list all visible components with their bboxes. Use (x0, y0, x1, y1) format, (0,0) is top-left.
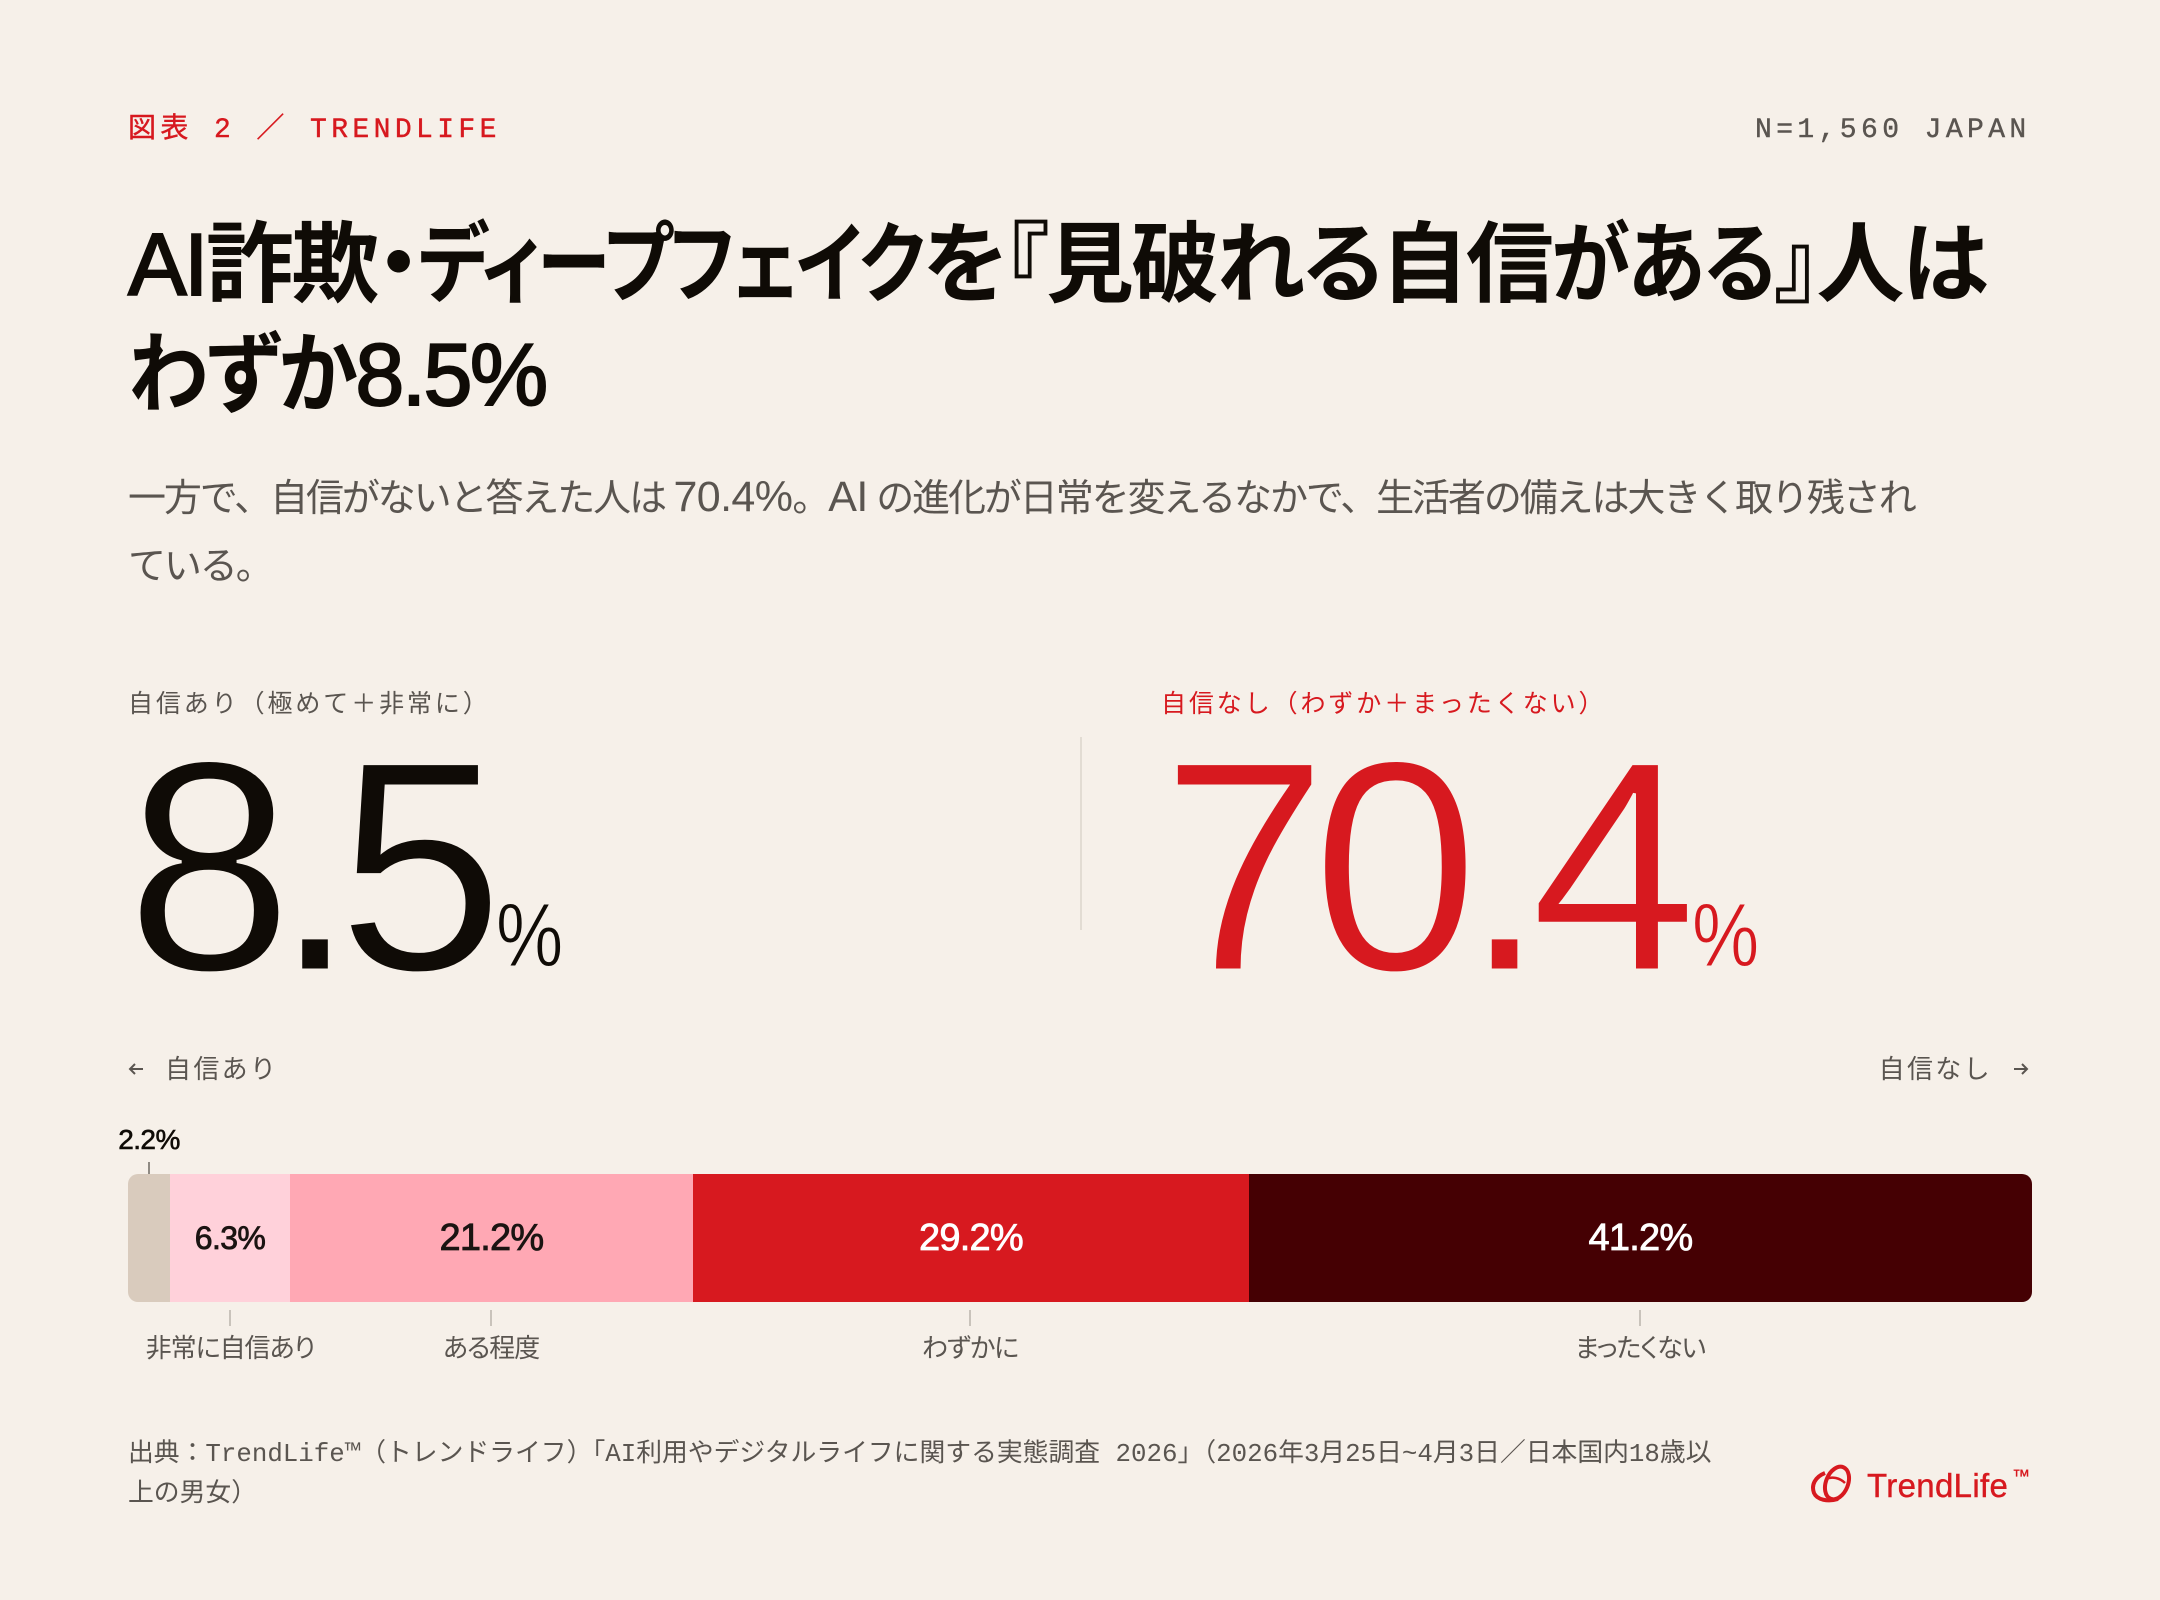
eyebrow: figure label: 図表 2 ／ TRENDLIFE (128, 115, 501, 146)
big number 70.4%: % (1692, 886, 1760, 986)
icon: left arrow (128, 1063, 143, 1075)
icon: right arrow (2014, 1063, 2028, 1075)
source note (128, 1439, 1711, 1509)
segment 6.3%: 6.3% (195, 1220, 265, 1256)
subtitle: 一方で、自信がないと答えた人は 70.4%。AI の進化が日常を変えるなかで、生活者の備えは大きく取り残され (128, 473, 1915, 521)
source note: 上の男女） (128, 1480, 257, 1509)
big number 70.4%: 70.4 (1161, 698, 1681, 1034)
label: very confident: 非常に自信あり (146, 1333, 314, 1363)
source note: 出典：TrendLife™（トレンドライフ）「AI利用やデジタルライフに関する実態調査 2026」（2026年3月25日~4月3日／日本国内18歳以 (128, 1440, 1711, 1469)
trademark: ™ (2012, 1466, 2030, 1486)
subtitle (128, 473, 1916, 588)
title: わずか (128, 325, 355, 424)
segment 2.2% (128, 1174, 170, 1302)
label: not confident: 自信なし（わずか＋まったくない） (1161, 690, 1606, 718)
segment 29.2% (693, 1174, 1249, 1302)
wordmark: TrendLife (1867, 1467, 2008, 1504)
tick 2.2% (148, 1162, 150, 1174)
panel: not confident stat (1161, 690, 1760, 1034)
big number 8.5%: % (496, 886, 563, 986)
tick (229, 1310, 231, 1326)
text: not confident: 自信なし (1879, 1054, 1992, 1084)
tick (490, 1310, 492, 1326)
title: がある (1551, 215, 1774, 314)
label: not at all: まったくない (1575, 1333, 1705, 1363)
title: ディープフェイク (418, 215, 923, 314)
title (126, 215, 1987, 424)
axis label: left (128, 1054, 278, 1084)
tick (1639, 1310, 1641, 1326)
segment 29.2%: 29.2% (919, 1216, 1023, 1258)
segment 21.2%: 21.2% (440, 1216, 543, 1258)
axis label: right (1879, 1054, 2028, 1084)
panel: confident stat (126, 690, 563, 1034)
stacked bar chart (128, 1174, 2032, 1302)
divider (1080, 737, 1082, 930)
subtitle: ている。 (128, 546, 272, 588)
segment 41.2% (1249, 1174, 2032, 1302)
sample size label: N=1,560 JAPAN (1755, 115, 2031, 146)
title: AI詐欺・ を『見破れる自信 』人は (128, 215, 1986, 314)
title: 8.5% (355, 325, 545, 424)
label: confident: 自信あり（極めて＋非常に） (128, 690, 491, 718)
segment 41.2%: 41.2% (1589, 1216, 1692, 1258)
segment 6.3% (170, 1174, 290, 1302)
segment 21.2% (290, 1174, 693, 1302)
tick (969, 1310, 971, 1326)
text: confident: 自信あり (165, 1054, 278, 1084)
big number 8.5%: 8.5 (126, 698, 485, 1034)
label: somewhat: ある程度 (443, 1333, 539, 1363)
label: slightly: わずかに (922, 1333, 1018, 1363)
logo: TrendLife (1811, 1464, 2030, 1504)
icon: logo mark (1811, 1464, 1852, 1502)
outside value 2.2%: 2.2% (118, 1124, 180, 1155)
